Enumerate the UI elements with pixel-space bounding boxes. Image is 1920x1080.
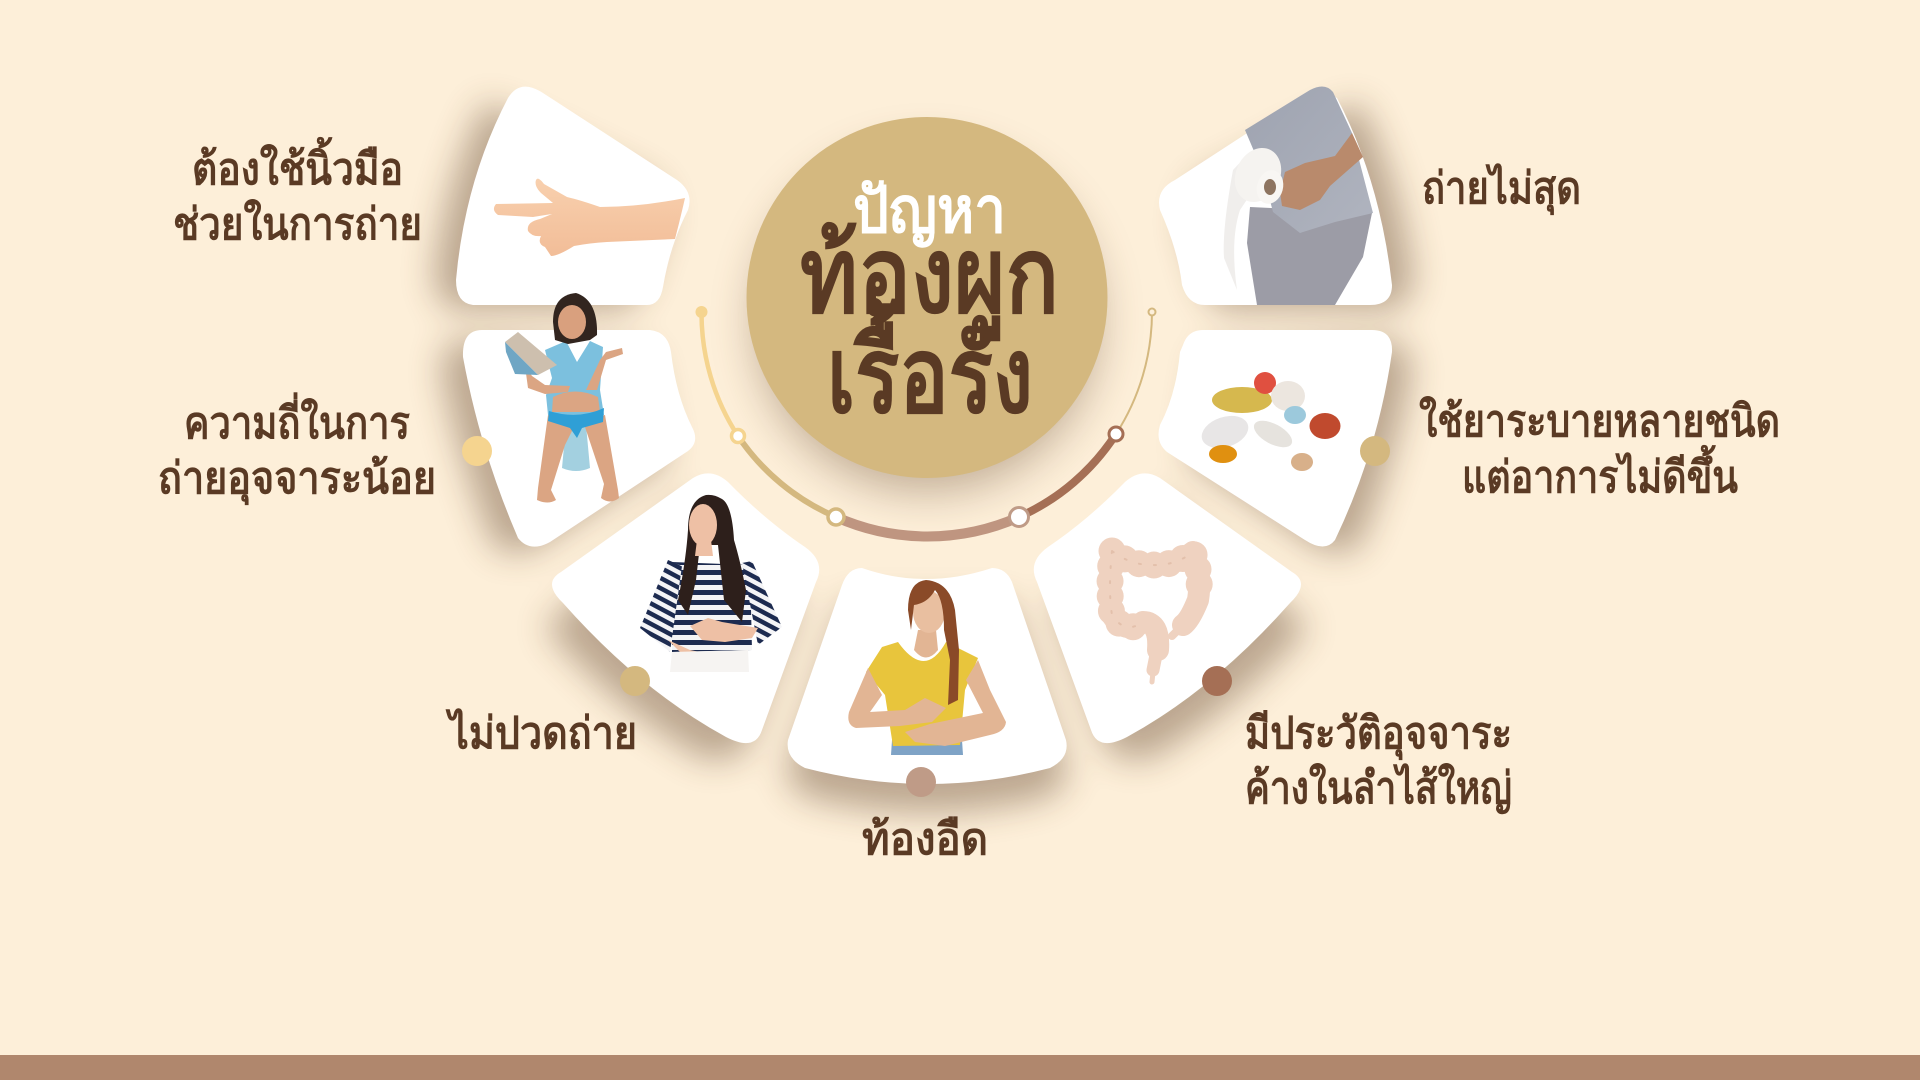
progress arc (696, 306, 1156, 536)
dot: no urge (620, 666, 650, 696)
icon: pointing hand (494, 179, 685, 256)
panel: finger (456, 87, 690, 305)
title: เรื้อรัง (827, 297, 1033, 435)
label: laxatives: แต่อาการไม่ดีขึ้น (1462, 444, 1738, 502)
label: laxatives (1419, 395, 1780, 502)
label: laxatives: ใช้ยาระบายหลายชนิด (1419, 395, 1780, 446)
label: colon: มีประวัติอุจจาระ (1245, 709, 1512, 761)
label: bloating: ท้องอืด (862, 815, 988, 864)
title: ท้องผูก (800, 217, 1059, 342)
label: infrequent: ถ่ายอุจจาระน้อย (158, 454, 436, 506)
dot (1360, 436, 1390, 466)
dot: colon (1202, 666, 1232, 696)
label: colon: ค้างในลำไส้ใหญ่ (1245, 762, 1512, 814)
panel: stool retained in colon (1034, 473, 1301, 743)
icon: woman on toilet (505, 293, 623, 502)
label: colon (1245, 709, 1512, 814)
central circle (746, 117, 1108, 478)
label: finger: ต้องใช้นิ้วมือ (192, 136, 403, 194)
label: infrequent (158, 392, 436, 506)
icon: woman with toilet paper (1224, 86, 1373, 305)
label: incomplete: ถ่ายไม่สุด (1422, 162, 1581, 216)
icon: colon (1110, 551, 1199, 682)
icon: woman in yellow shirt (848, 580, 1006, 755)
title (800, 174, 1059, 435)
title: ปัญหา (853, 174, 1006, 247)
label: infrequent: ความถี่ในการ (184, 392, 410, 448)
panel: incomplete evacuation (1159, 86, 1392, 305)
dot: bloating (906, 767, 936, 797)
panel shadows (434, 102, 1414, 812)
icon: pills (1198, 372, 1340, 471)
panel: bloating (788, 568, 1067, 784)
bottom bar (0, 1055, 1920, 1080)
central circle shadow (755, 148, 1099, 492)
label: finger (173, 136, 422, 249)
dot: infrequent (462, 436, 492, 466)
label: finger: ช่วยในการถ่าย (173, 198, 422, 249)
panel: infrequent bowel movement (463, 293, 695, 547)
label: no urge: ไม่ปวดถ่าย (445, 707, 637, 758)
panel: many laxatives (1159, 330, 1392, 546)
panel: no urge (552, 473, 819, 743)
icon: woman in striped shirt (640, 495, 782, 672)
